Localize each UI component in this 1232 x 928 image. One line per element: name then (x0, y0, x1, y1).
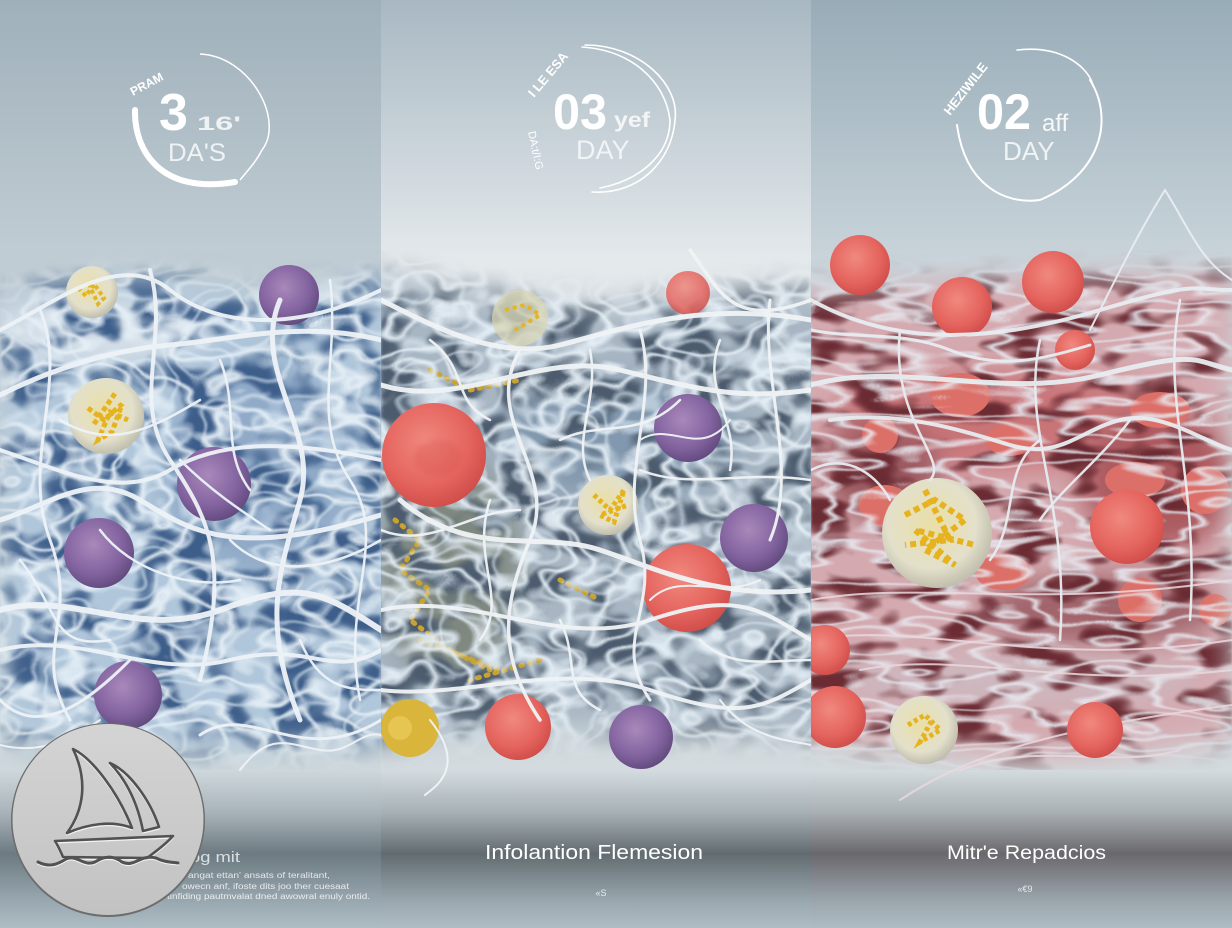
day number: 3 (159, 84, 188, 142)
panel: day 03 inflammation mesh (380, 250, 811, 795)
cell: red bottom (485, 694, 551, 760)
caption heading: Mitr'e Repadcios (947, 843, 1106, 864)
cell: red bottom left (811, 686, 866, 748)
cell: red top center (1022, 251, 1084, 313)
day label: DA'S (168, 139, 226, 167)
cell: red top left (830, 235, 890, 295)
caption: right panel (947, 843, 1106, 894)
cell: purple upper (654, 394, 722, 462)
cell: yellow granulocyte (578, 475, 638, 535)
cell: yellow bottom left (381, 699, 439, 757)
engraving highlight (38, 751, 178, 867)
ring label: HEZIWILE (941, 59, 991, 118)
mesh base (380, 250, 811, 770)
cell: red right (1090, 490, 1164, 564)
panel: day 3 blue fibrin mesh (0, 250, 381, 770)
major fibers (0, 270, 381, 770)
cell: yellow granulocyte (68, 378, 144, 454)
day label: DAY (1003, 136, 1055, 166)
day number: 02 (977, 84, 1031, 140)
cell: purple bottom (609, 705, 673, 769)
mesh base (811, 250, 1232, 770)
ring label top: I LE ESA (525, 48, 572, 100)
day number: 03 (553, 84, 607, 140)
cell: yellow top (492, 290, 548, 346)
ring stroke (957, 49, 1102, 201)
cell: large red blood cell (382, 403, 486, 507)
major fibers (811, 190, 1232, 640)
ring label bottom: DA:t/I:G (525, 130, 545, 171)
cell: red center right (643, 544, 731, 632)
number suffix: aff (1042, 110, 1069, 137)
day label: DAY (576, 135, 630, 165)
caption: center panel (485, 842, 703, 898)
logo badge: sailboat (11, 723, 205, 917)
caption body: owecn anf, ifoste dits joo ther cuesaat (182, 882, 350, 891)
cell: purple bottom (94, 661, 162, 729)
caption body: angat ettan' ansats of teralitant, (188, 871, 330, 880)
cell: yellow granulocyte top (66, 266, 118, 318)
fine pink fibers (811, 580, 1232, 800)
cell: red small (1055, 330, 1095, 370)
caption heading: og mit (190, 849, 241, 866)
cell: purple right (720, 504, 788, 572)
ring: day 03 (525, 45, 675, 192)
caption: left panel (167, 849, 370, 901)
caption body (167, 871, 370, 901)
cell: red upper (932, 277, 992, 337)
mesh base (0, 250, 381, 770)
ring stroke (582, 45, 675, 192)
cell: large yellow granulocyte (882, 478, 992, 588)
caption body: tinfiding pautmvalat dned awowral enuly ontid. (167, 892, 370, 901)
number suffix: 16' (197, 114, 241, 135)
cell: red left edge (811, 625, 850, 675)
small icon text: «€9 (1017, 884, 1033, 894)
panel: day 02 repair mesh (800, 190, 1232, 800)
icon: sailboat (38, 749, 178, 867)
caption heading: Infolantion Flemesion (485, 842, 703, 864)
ring: day 02 (941, 49, 1102, 201)
ring label: PRAM (128, 70, 166, 99)
number suffix: yef (614, 109, 651, 132)
ring: day 3 (128, 54, 269, 184)
engraving outline (38, 749, 178, 865)
small icon text: «S (595, 888, 607, 898)
cell: purple top (259, 265, 319, 325)
ring stroke (135, 54, 269, 184)
cell: yellow bottom (890, 696, 958, 764)
cell: purple mid (177, 447, 251, 521)
cell: red bottom right (1067, 702, 1123, 758)
background red cells (859, 373, 1231, 626)
major fibers (381, 250, 811, 795)
cell: red top (666, 271, 710, 315)
cell: purple lower (64, 518, 134, 588)
badge disc (11, 723, 205, 917)
